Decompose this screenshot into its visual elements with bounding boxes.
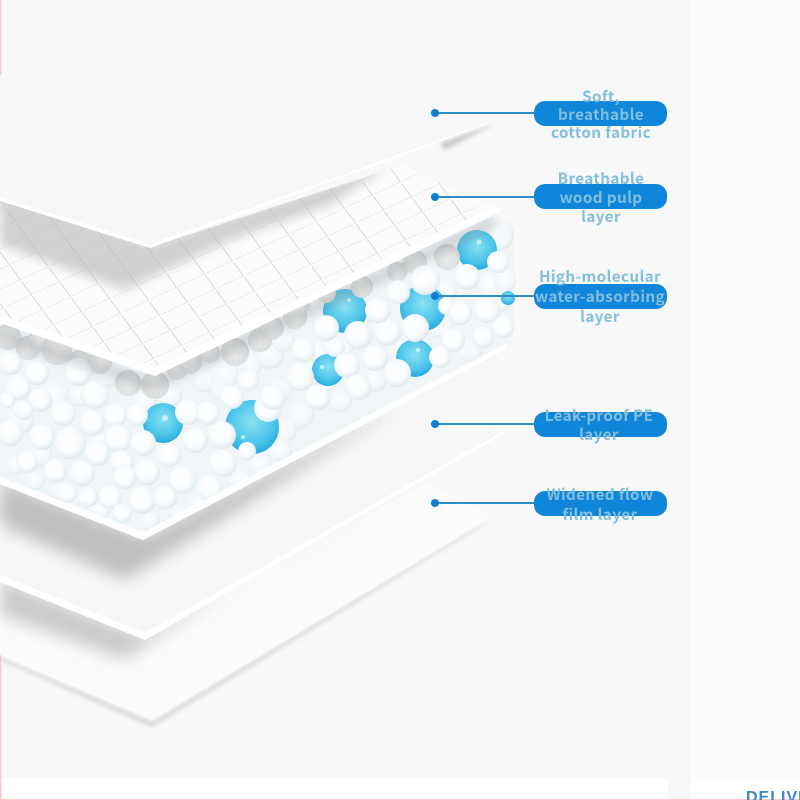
callout: leak-proof PE layer	[431, 404, 667, 445]
callout: soft, breathable cotton fabric: breathable	[558, 103, 644, 125]
layer: leak-proof PE	[0, 416, 390, 640]
layer: widened flow film	[0, 524, 482, 728]
white beads	[0, 251, 514, 523]
callout: high-molecular water-absorbing layer	[431, 265, 667, 327]
callout: widened flow film layer: film layer	[563, 503, 637, 525]
absorbent blue beads	[143, 230, 515, 454]
shaded beads	[0, 244, 460, 399]
callout: breathable wood pulp layer: layer	[581, 205, 621, 227]
callout: soft, breathable cotton fabric: cotton fabric	[551, 121, 651, 143]
filler beads	[5, 219, 517, 530]
callout: high-molecular water-absorbing layer: High-molecular	[539, 265, 661, 287]
callout: widened flow film layer: Widened flow	[547, 483, 653, 505]
callout: breathable wood pulp layer: Breathable	[558, 167, 644, 189]
callout: soft, breathable cotton fabric	[431, 85, 667, 143]
callout: high-molecular water-absorbing layer: water-absorbing	[535, 285, 665, 307]
callout: leak-proof PE layer: Leak-proof PE	[545, 404, 653, 426]
callout: breathable wood pulp layer	[431, 167, 667, 227]
callout: widened flow film layer	[431, 483, 667, 525]
callout: soft, breathable cotton fabric: Soft,	[582, 85, 620, 107]
layer: soft cotton fabric	[0, 32, 495, 248]
callout: breathable wood pulp layer: wood pulp	[560, 186, 642, 208]
callout: high-molecular water-absorbing layer: layer	[580, 305, 620, 327]
layer: high-molecular water-absorbing beads	[0, 215, 517, 540]
layer: breathable wood pulp grid	[0, 165, 510, 385]
callout: leak-proof PE layer: layer	[579, 423, 619, 445]
